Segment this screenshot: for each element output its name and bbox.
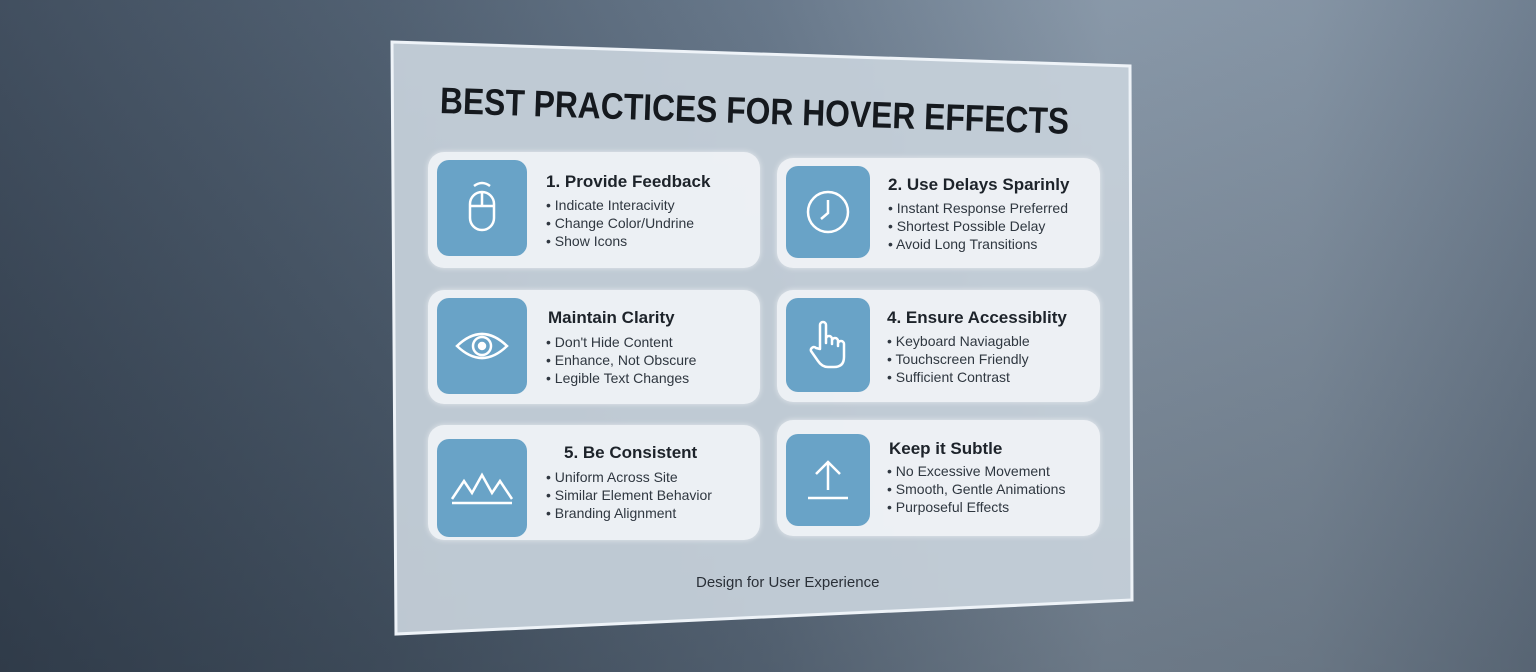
- card 3: • Enhance, Not Obscure: [546, 352, 696, 368]
- icon: clock: [786, 166, 870, 258]
- card 6: Keep it Subtle: [889, 439, 1002, 458]
- card 1: • Indicate Interacivity: [546, 197, 675, 213]
- card 3: [428, 290, 760, 404]
- card 1: • Show Icons: [546, 233, 627, 249]
- icon: mountains: [437, 439, 527, 537]
- card 2: • Instant Response Preferred: [888, 200, 1068, 216]
- card 2: • Avoid Long Transitions: [888, 236, 1037, 252]
- card 2: • Shortest Possible Delay: [888, 218, 1045, 234]
- footer text: Design for User Experience: [696, 574, 879, 591]
- card 2: [777, 158, 1100, 268]
- card 4: • Touchscreen Friendly: [887, 351, 1029, 367]
- card 3: • Legible Text Changes: [546, 370, 689, 386]
- card 6: • No Excessive Movement: [887, 463, 1050, 479]
- card 1: • Change Color/Undrine: [546, 215, 694, 231]
- card 5: • Uniform Across Site: [546, 469, 678, 485]
- card 5: [428, 425, 760, 540]
- card 6: [777, 420, 1100, 536]
- card 4: • Keyboard Naviagable: [887, 333, 1030, 349]
- card 6: • Smooth, Gentle Animations: [887, 481, 1065, 497]
- card 1: 1. Provide Feedback: [546, 172, 710, 191]
- card 5: 5. Be Consistent: [564, 443, 697, 462]
- card 4: [777, 290, 1100, 402]
- title: BEST PRACTICES FOR HOVER EFFECTS: [439, 80, 1070, 142]
- card 1: [428, 152, 760, 268]
- icon: mouse: [437, 160, 527, 256]
- card 4: • Sufficient Contrast: [887, 369, 1010, 385]
- card 4: 4. Ensure Accessiblity: [887, 308, 1067, 327]
- card 3: Maintain Clarity: [548, 308, 675, 327]
- card 5: • Similar Element Behavior: [546, 487, 712, 503]
- icon: hand pointer: [786, 298, 870, 392]
- card 6: • Purposeful Effects: [887, 499, 1009, 515]
- card 5: • Branding Alignment: [546, 505, 676, 521]
- card 2: 2. Use Delays Sparinly: [888, 175, 1069, 194]
- icon: upload arrow: [786, 434, 870, 526]
- card 3: • Don't Hide Content: [546, 334, 673, 350]
- icon: eye: [437, 298, 527, 394]
